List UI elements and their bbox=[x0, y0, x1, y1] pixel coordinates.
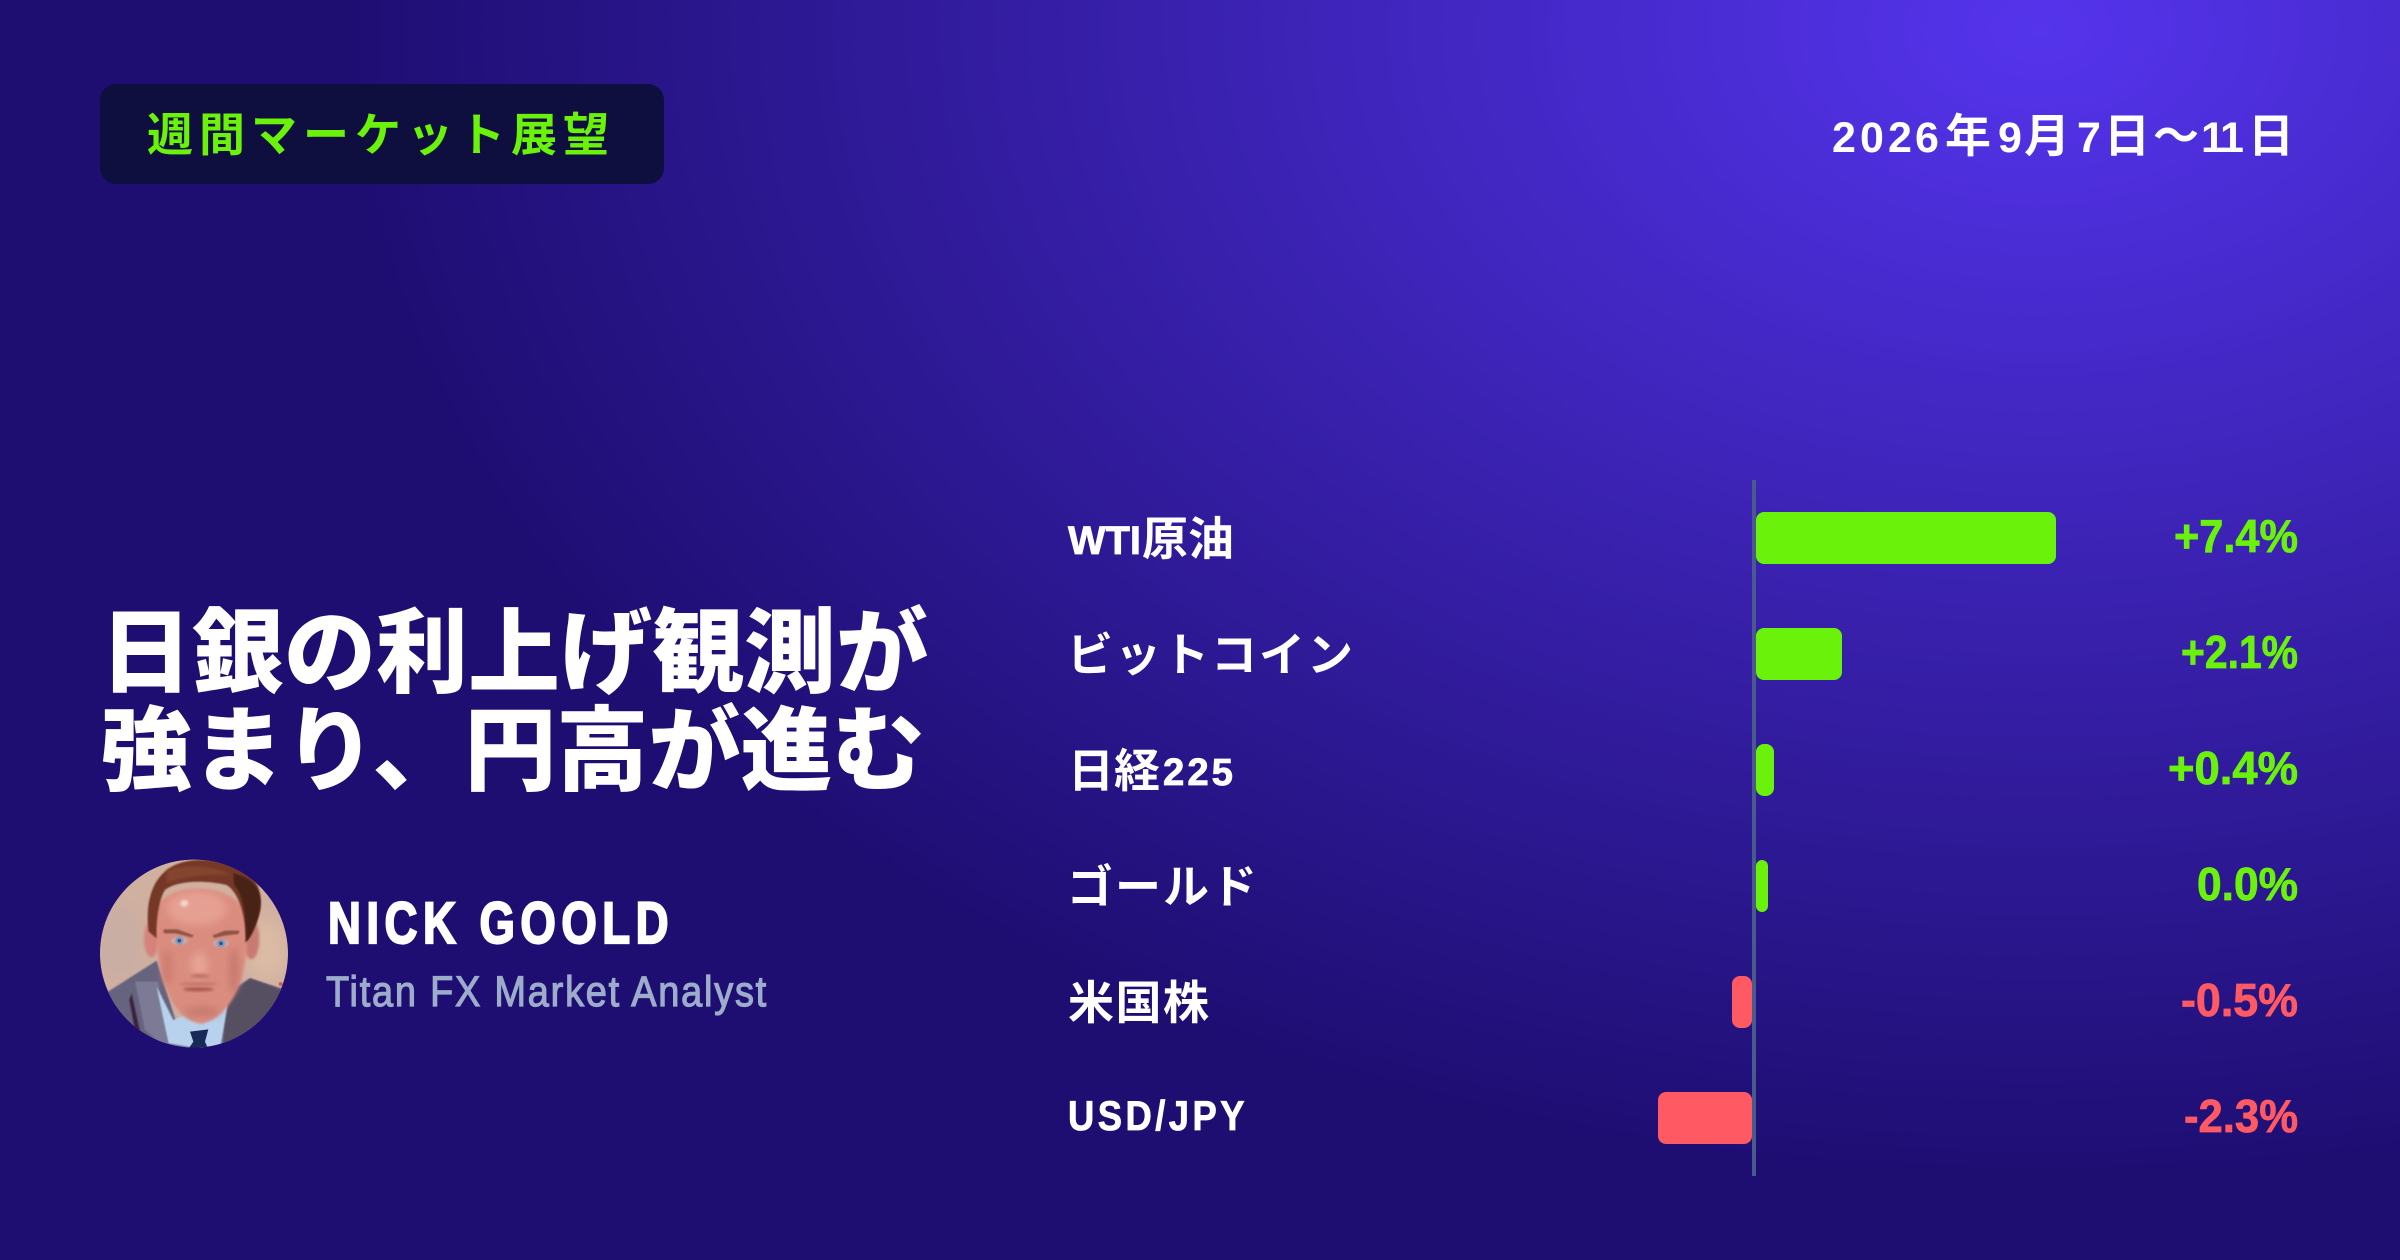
row: USD/JPY: -2.3% bbox=[2184, 1090, 2298, 1142]
hair bbox=[148, 860, 261, 943]
row: Bitcoin: ビットコイン bbox=[1067, 629, 1355, 681]
face bbox=[155, 889, 248, 1024]
ears bbox=[144, 921, 159, 957]
suit bbox=[108, 960, 282, 1048]
zero axis bbox=[1752, 480, 1756, 1176]
badge: weekly market outlook: 週間マーケット展望 bbox=[147, 109, 615, 161]
title: 強まり、円高が進む bbox=[100, 701, 924, 803]
brows bbox=[163, 929, 194, 937]
row: US equities: -0.5% bbox=[2181, 974, 2298, 1026]
row: WTI crude: 原油 bbox=[1142, 513, 1234, 565]
badge: weekly market outlook bbox=[100, 84, 664, 184]
row: WTI crude: +7.4% bbox=[2174, 510, 2298, 562]
row: Nikkei 225: 225 bbox=[1163, 752, 1236, 794]
tie bbox=[190, 1029, 208, 1048]
analyst role: Titan FX Market Analyst bbox=[326, 968, 768, 1016]
nose bbox=[191, 952, 207, 978]
row: USD/JPY bbox=[1068, 1090, 2298, 1144]
row: USD/JPY: USD/JPY bbox=[1068, 1092, 1248, 1139]
row: Gold: 0.0% bbox=[2197, 858, 2298, 910]
row: US equities bbox=[1068, 974, 2298, 1029]
row: WTI crude bbox=[1068, 510, 2298, 565]
shirt bbox=[157, 987, 227, 1050]
row: US equities: 米国株 bbox=[1068, 977, 1210, 1029]
eyes bbox=[171, 937, 188, 945]
row: Nikkei 225 bbox=[1068, 742, 2298, 797]
row: Nikkei 225: 日経 bbox=[1068, 745, 1160, 797]
bar chart: weekly performance bbox=[1067, 480, 2298, 1176]
date range: 2026年9月7日〜11日 bbox=[1832, 110, 2294, 162]
mouth bbox=[183, 987, 214, 991]
row: Bitcoin bbox=[1067, 626, 2298, 681]
row: WTI crude: WTI bbox=[1068, 519, 1141, 563]
row: Bitcoin: +2.1% bbox=[2181, 626, 2298, 678]
title: 日銀の利上げ観測が bbox=[100, 603, 928, 705]
row: Gold: ゴールド bbox=[1067, 861, 1259, 913]
analyst name: NICK GOOLD bbox=[328, 891, 674, 956]
row: Nikkei 225: +0.4% bbox=[2168, 742, 2298, 794]
avatar: analyst portrait bbox=[100, 860, 288, 1048]
title bbox=[100, 603, 928, 803]
row: Gold bbox=[1067, 858, 2298, 913]
